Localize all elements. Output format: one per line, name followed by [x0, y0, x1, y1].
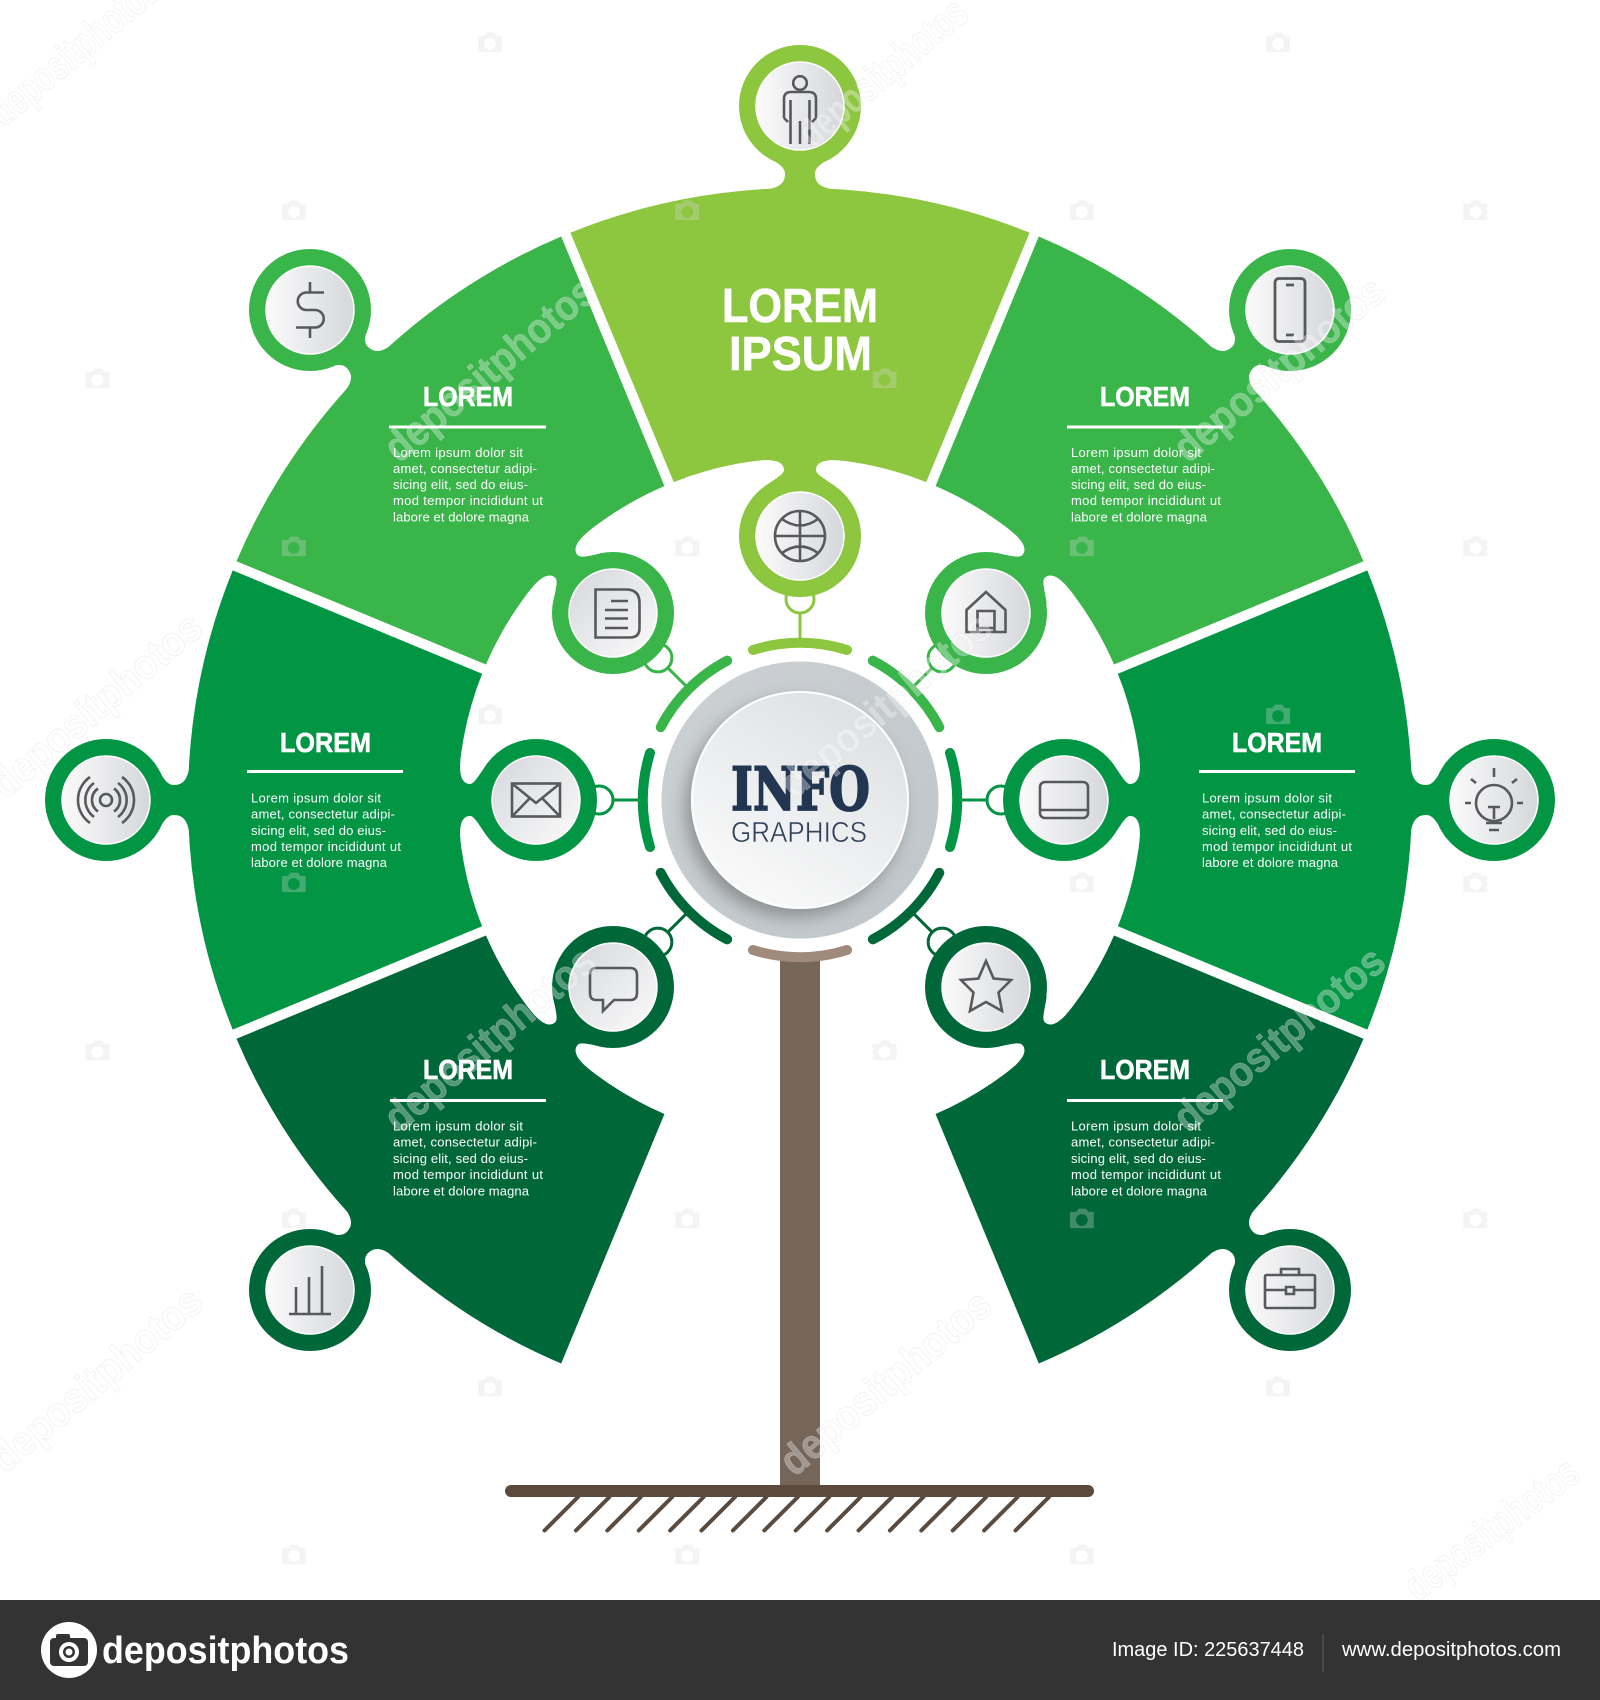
icon: card	[1003, 739, 1125, 861]
text block: upper right: Lorem ipsum dolor sit	[1071, 445, 1201, 460]
icon: phone	[1229, 249, 1351, 371]
trunk	[753, 950, 847, 1487]
central disc	[662, 662, 938, 938]
icon: light bulb	[1433, 739, 1555, 861]
watermarks: depositphotos	[1164, 267, 1394, 471]
text block: upper right: labore et dolore magna	[1071, 510, 1208, 524]
text block: middle right: labore et dolore magna	[1202, 855, 1339, 870]
text block: middle left: amet, consectetur adipi-	[251, 807, 395, 822]
text block: upper right: amet, consectetur adipi-	[1071, 461, 1215, 476]
text block: lower right: labore et dolore magna	[1071, 1184, 1208, 1198]
text block: upper right: sicing elit, sed do eius-	[1071, 477, 1206, 492]
text block: lower left: labore et dolore magna	[393, 1184, 530, 1198]
text block: lower right: mod tempor incididunt ut	[1071, 1167, 1221, 1182]
ground with hatching	[505, 1485, 1094, 1530]
segment: upper left	[181, 181, 856, 856]
footer website: www.depositphotos.com	[1341, 1639, 1561, 1661]
icon: home	[925, 552, 1047, 674]
text block: middle left: LOREM	[280, 727, 371, 758]
icon: star	[925, 926, 1047, 1048]
segment: lower right	[744, 744, 1419, 1419]
watermarks: depositphotos	[374, 937, 605, 1141]
watermarks: depositphotos	[770, 1280, 1000, 1484]
text block: middle left: mod tempor incididunt ut	[251, 839, 401, 854]
icon: depositphotos logo	[41, 1622, 97, 1678]
segment: upper right	[744, 181, 1419, 856]
text block: middle left	[247, 727, 403, 870]
text block: upper right: mod tempor incididunt ut	[1071, 493, 1221, 508]
text block: lower left: amet, consectetur adipi-	[393, 1135, 537, 1150]
icon: bar chart	[249, 1229, 371, 1351]
text block: lower left	[390, 1054, 546, 1198]
heading: lorem ipsum: LOREM	[722, 280, 878, 333]
text block: middle right: sicing elit, sed do eius-	[1202, 823, 1337, 838]
footer bar	[0, 1600, 1600, 1700]
segment: middle right	[950, 570, 1446, 1030]
icon: chat bubble	[552, 926, 674, 1048]
text block: lower right	[1067, 1054, 1223, 1198]
text block: lower right: LOREM	[1100, 1054, 1190, 1085]
title: info graphics: GRAPHICS	[731, 817, 867, 849]
text block: upper right: LOREM	[1100, 381, 1190, 412]
segment: middle left	[154, 570, 650, 1030]
text block: lower right: amet, consectetur adipi-	[1071, 1135, 1215, 1150]
icon: document	[552, 552, 674, 674]
text block: lower left: mod tempor incididunt ut	[393, 1167, 543, 1182]
text block: upper left: Lorem ipsum dolor sit	[393, 445, 523, 460]
text block: lower right: Lorem ipsum dolor sit	[1071, 1118, 1201, 1134]
text block: upper left: amet, consectetur adipi-	[393, 461, 537, 476]
icon: globe	[739, 475, 861, 597]
text block: upper left	[389, 381, 546, 524]
text block: middle right: LOREM	[1232, 727, 1322, 758]
title: info graphics	[731, 755, 870, 849]
text block: lower left: LOREM	[423, 1054, 513, 1085]
faint camera marks	[86, 33, 1487, 1564]
text block: upper left: sicing elit, sed do eius-	[393, 477, 528, 492]
heading: lorem ipsum	[722, 280, 878, 381]
text block: middle left: Lorem ipsum dolor sit	[251, 790, 381, 806]
text block: middle right: Lorem ipsum dolor sit	[1202, 790, 1332, 806]
text block: middle left: labore et dolore magna	[251, 855, 388, 870]
icon: dollar	[249, 249, 371, 371]
text block: upper left: LOREM	[423, 381, 513, 412]
watermarks: depositphotos	[770, 603, 1000, 807]
watermarks: depositphotos	[1164, 937, 1394, 1141]
icon: briefcase	[1229, 1229, 1351, 1351]
icon: person	[739, 45, 861, 167]
heading: lorem ipsum: IPSUM	[729, 328, 872, 381]
text block: upper right	[1067, 381, 1223, 524]
text block: middle left: sicing elit, sed do eius-	[251, 823, 386, 838]
text block: upper left: labore et dolore magna	[393, 510, 530, 524]
segment: top lorem ipsum	[570, 154, 1030, 650]
footer brand name: depositphotos	[102, 1630, 349, 1672]
segment: lower left	[181, 744, 856, 1419]
footer image id: Image ID: 225637448	[1112, 1639, 1304, 1661]
text block: middle right: amet, consectetur adipi-	[1202, 807, 1346, 822]
text block: lower left: Lorem ipsum dolor sit	[393, 1118, 523, 1134]
text block: middle right	[1199, 727, 1355, 870]
text block: upper left: mod tempor incididunt ut	[393, 493, 543, 508]
watermarks: depositphotos	[374, 267, 605, 471]
text block: lower right: sicing elit, sed do eius-	[1071, 1151, 1206, 1166]
text block: lower left: sicing elit, sed do eius-	[393, 1151, 528, 1166]
icon: signal	[45, 739, 167, 861]
text block: middle right: mod tempor incididunt ut	[1202, 839, 1352, 854]
title: info graphics: INFO	[731, 755, 870, 825]
icon: envelope	[475, 739, 597, 861]
